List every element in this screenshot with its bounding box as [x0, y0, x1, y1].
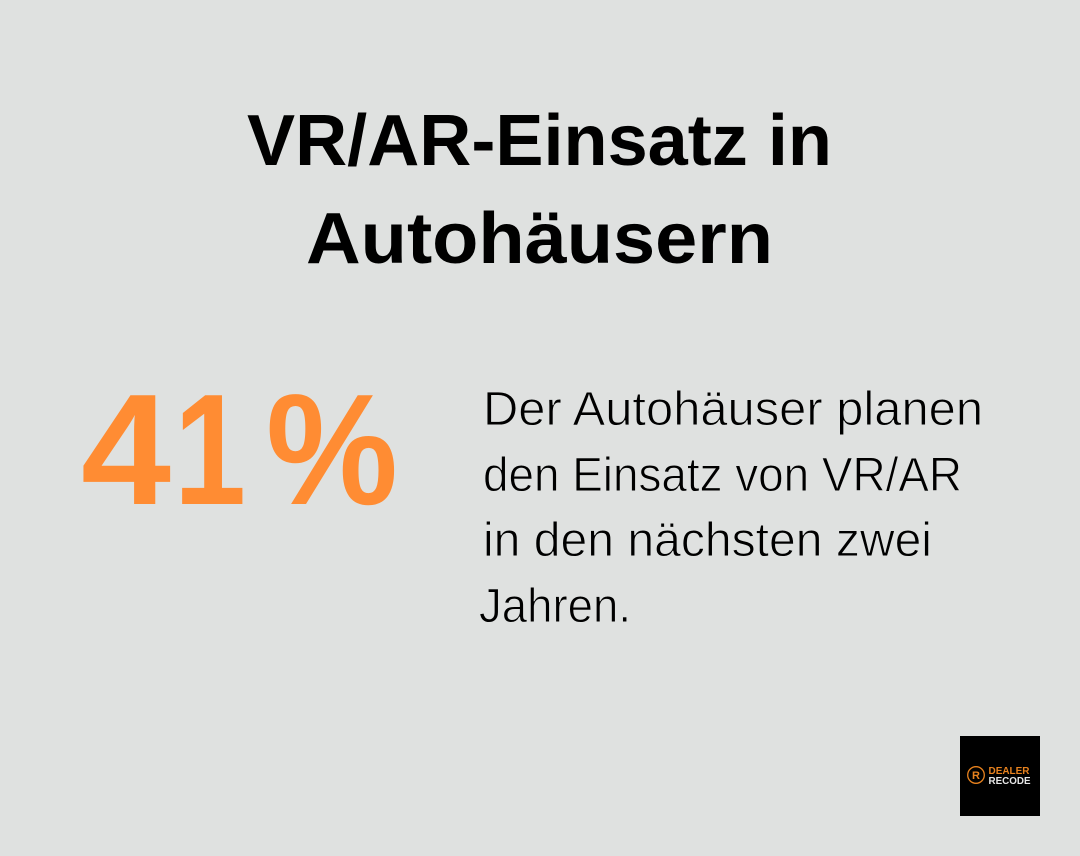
logo wordmark: DEALER: [988, 766, 1030, 777]
logo wordmark: [988, 766, 1031, 787]
stat description: [479, 383, 983, 633]
big stat: 41%: 4: [81, 362, 171, 538]
stat description: Der Autohäuser planen: [483, 383, 983, 436]
stat description: den Einsatz von VR/AR: [483, 449, 962, 502]
logo wordmark: RECODE: [988, 776, 1031, 787]
title: Autohäusern: [306, 199, 773, 279]
title: VR/AR-Einsatz in: [247, 101, 832, 181]
stat description: Jahren.: [479, 580, 631, 633]
big stat: 41%: %: [266, 362, 398, 538]
big stat: 41%: [81, 362, 398, 538]
title: [247, 101, 832, 279]
big stat: 41%: 1: [174, 362, 246, 538]
logo: Dealer Recode: [960, 736, 1040, 816]
icon: R emblem: R: [972, 770, 980, 782]
stat description: in den nächsten zwei: [483, 514, 932, 567]
